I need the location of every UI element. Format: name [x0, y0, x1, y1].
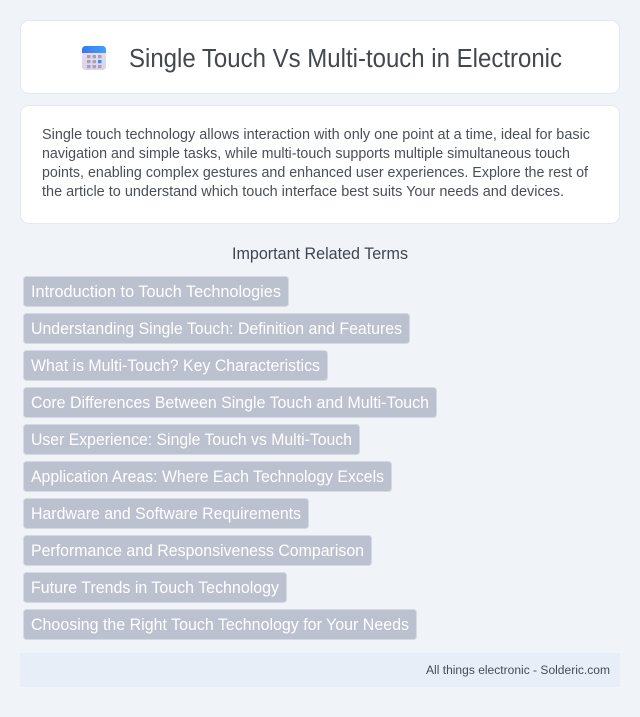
term list: [24, 276, 436, 640]
term chip 8: Performance and Responsiveness Comparison: [31, 542, 364, 560]
term chip 5: User Experience: Single Touch vs Multi-Touch: [31, 431, 352, 449]
title: Single Touch Vs Multi-touch in Electronic: [129, 45, 562, 73]
icon: calendar grid: [82, 46, 106, 70]
panel: intro paragraph: Single touch technology allows interaction with only one point at a time, ideal for basic: [42, 127, 591, 143]
term chip 7: [24, 498, 308, 528]
term chip 3: What is Multi-Touch? Key Characteristics: [31, 357, 320, 375]
term chip 4: Core Differences Between Single Touch and Multi-Touch: [31, 394, 429, 412]
panel: intro paragraph: navigation and simple tasks, while multi-touch supports multiple simultaneous touch: [42, 146, 570, 162]
footer bar: All things electronic - Solderic.com: [426, 663, 610, 677]
term chip 4: [24, 388, 436, 418]
term chip 9: Future Trends in Touch Technology: [31, 579, 280, 597]
term chip 1: [24, 276, 288, 306]
term chip 10: Choosing the Right Touch Technology for Your Needs: [31, 616, 409, 634]
section heading: Important Related Terms: [232, 244, 408, 263]
term chip 2: Understanding Single Touch: Definition and Features: [31, 320, 402, 338]
term chip 9: [24, 572, 286, 602]
panel: intro paragraph: [20, 106, 620, 224]
term chip 7: Hardware and Software Requirements: [31, 505, 301, 523]
footer bar: [20, 653, 620, 687]
term chip 1: Introduction to Touch Technologies: [31, 283, 281, 301]
term chip 5: [24, 424, 360, 454]
term chip 10: [24, 610, 416, 640]
term chip 8: [24, 536, 372, 566]
term chip 3: [24, 350, 328, 380]
term chip 6: Application Areas: Where Each Technology Excels: [31, 468, 384, 486]
panel: intro paragraph: points, enabling complex gestures and enhanced user experiences. Explore the rest of: [42, 165, 589, 181]
panel: intro paragraph: the article to understand which touch interface best suits Your needs and devices.: [42, 184, 564, 200]
term chip 2: [24, 314, 410, 344]
header panel: [20, 20, 620, 94]
term chip 6: [24, 462, 392, 492]
